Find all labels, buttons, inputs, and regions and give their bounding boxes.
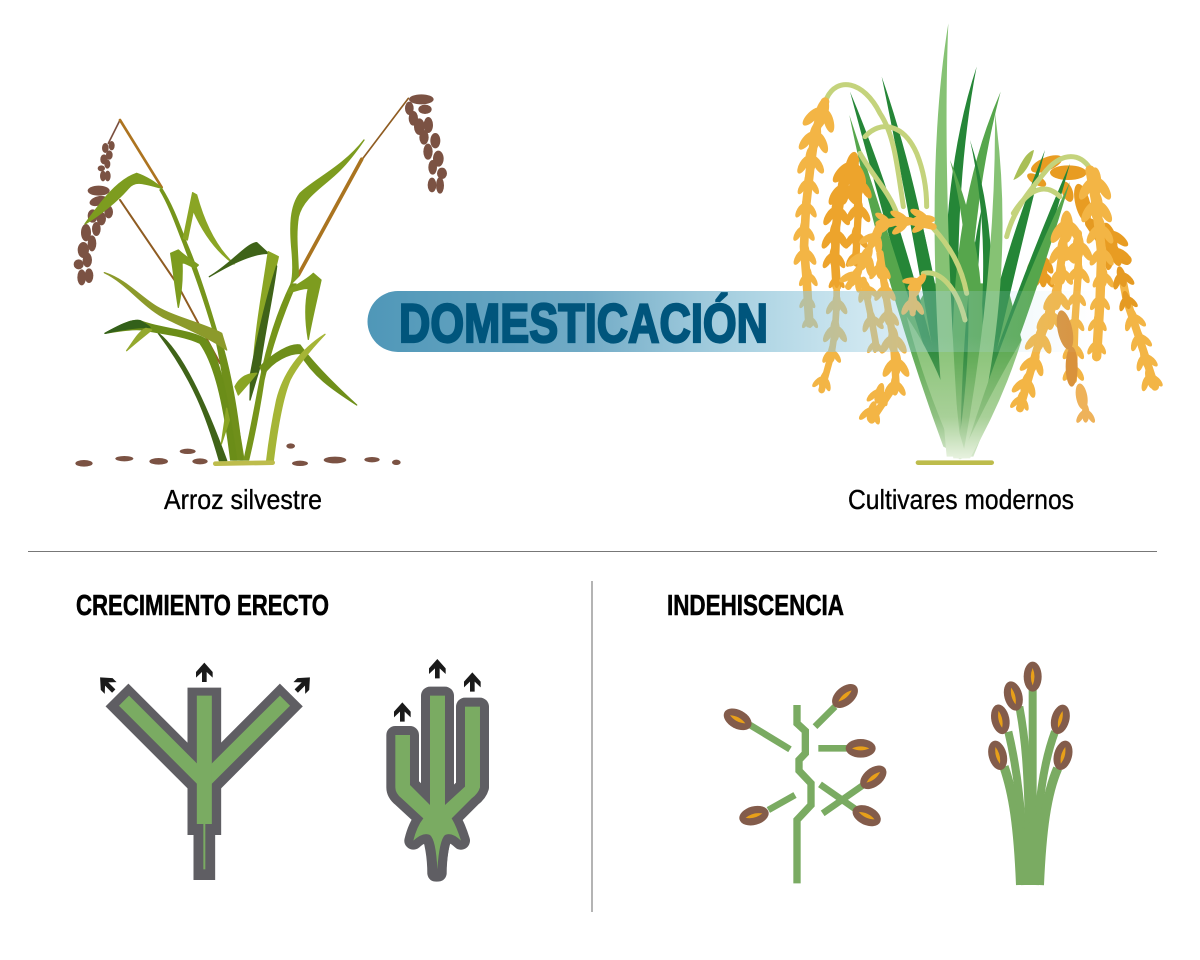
arrow: center xyxy=(429,659,446,678)
leaf fan xyxy=(849,23,1070,459)
banner: domestication xyxy=(368,291,1100,354)
golden panicles xyxy=(791,93,1165,427)
panel: indehiscence icons xyxy=(720,662,1076,885)
deep amber panicle xyxy=(1107,263,1140,313)
arrow: left xyxy=(94,672,120,697)
arrow: right xyxy=(464,672,481,692)
label: modern cultivars: Cultivares modernos xyxy=(848,484,1074,515)
panicle: left grains xyxy=(74,141,115,285)
arrow: right xyxy=(290,672,316,697)
plant: wild rice xyxy=(74,94,447,467)
icon: erect growth xyxy=(394,659,481,882)
heading: indehiscence: INDEHISCENCIA xyxy=(667,590,844,622)
ground bar xyxy=(215,463,273,464)
darker gold panicles xyxy=(819,148,874,289)
heading: erect growth: CRECIMIENTO ERECTO xyxy=(76,590,329,622)
scattered seeds xyxy=(75,443,401,467)
panicle: right grains xyxy=(405,94,447,194)
panel: erect growth icons xyxy=(94,659,481,882)
icon: spreading growth xyxy=(94,663,316,880)
panicle spines xyxy=(804,102,1155,420)
label: wild rice: Arroz silvestre xyxy=(164,484,322,515)
panicle stems xyxy=(108,98,408,363)
leaves xyxy=(85,140,364,461)
bud xyxy=(1013,150,1034,180)
icon: non-shattering panicle xyxy=(985,662,1076,885)
ground bar xyxy=(918,456,992,470)
lighter gold panicles xyxy=(791,93,1116,427)
arrow: left xyxy=(394,702,411,722)
icon: shattering panicle xyxy=(720,679,891,883)
plant: modern cultivar xyxy=(791,23,1165,463)
banner title: DOMESTICACIÓN xyxy=(399,292,768,354)
panicles behind leaves xyxy=(1024,152,1135,289)
arrow: center xyxy=(196,663,213,682)
panicle stalks xyxy=(827,85,1090,320)
